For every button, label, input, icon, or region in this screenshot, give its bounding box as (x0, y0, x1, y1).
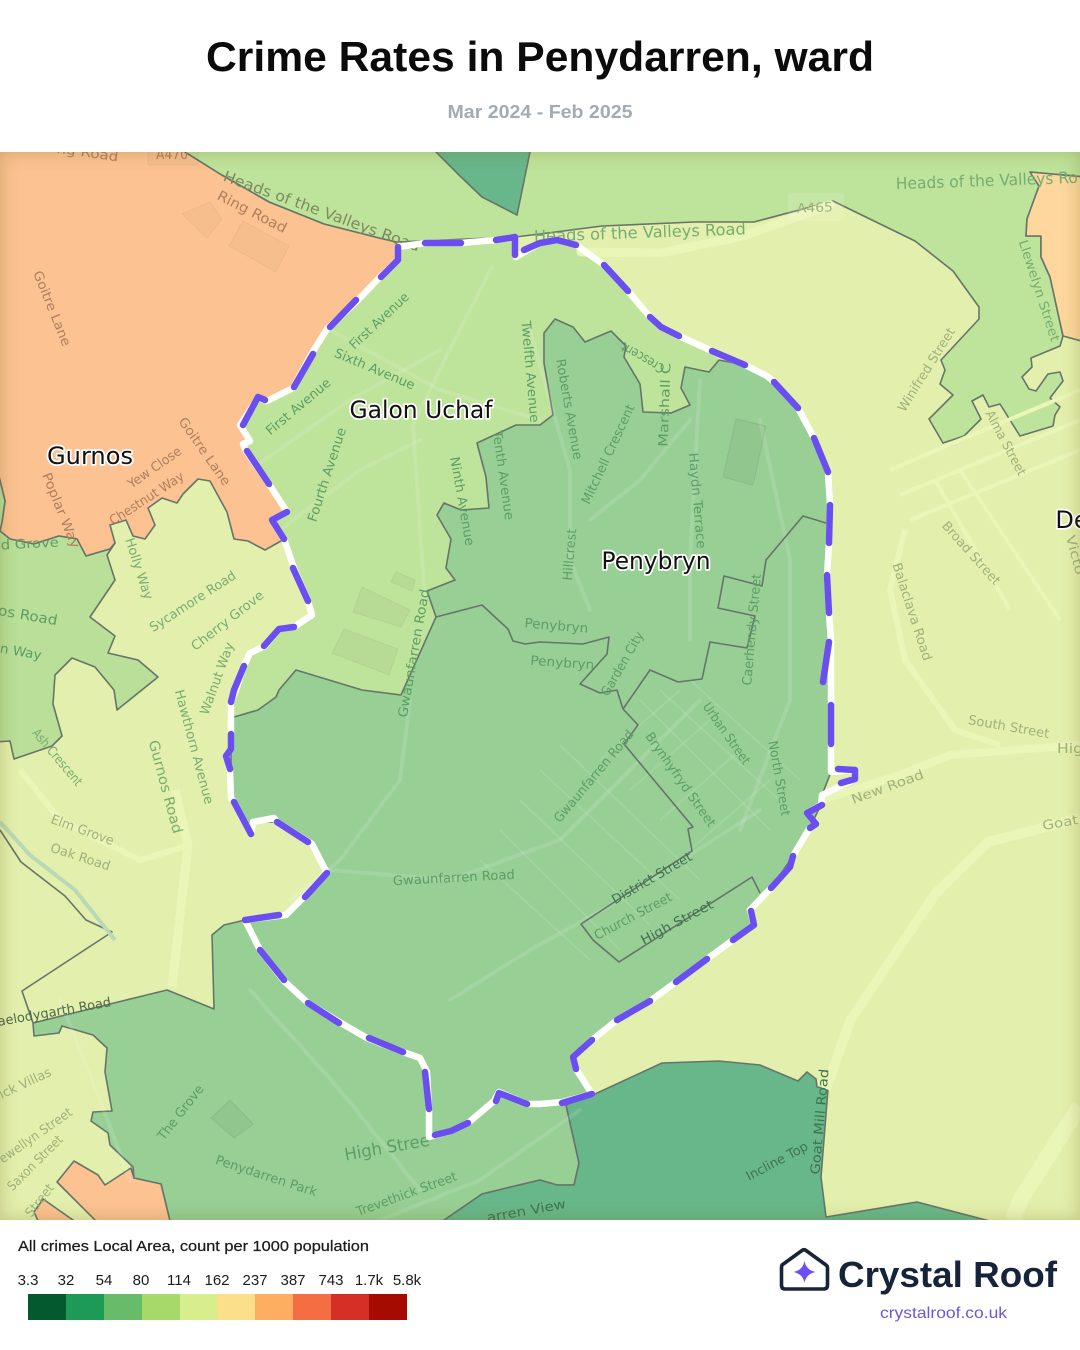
place labels (47, 396, 1080, 575)
street labels: Goat Mill Road (808, 1068, 833, 1175)
street labels: Ash Crescent (28, 726, 85, 789)
street labels: Urban Street (699, 700, 753, 768)
brand url: crystalroof.co.uk (880, 1305, 1008, 1322)
region: Penybryn and Penydarren green area (33, 319, 831, 1225)
legend scale values: 54 (96, 1272, 112, 1289)
region: north-east light orange area (1026, 172, 1080, 342)
street labels: First Avenue (263, 376, 334, 439)
street labels: Ninth Avenue (446, 456, 477, 547)
icon: house with star (782, 1250, 828, 1289)
brand name: Crystal Roof (838, 1254, 1058, 1295)
street labels: Penybryn (524, 616, 589, 637)
street labels: First Avenue (347, 290, 413, 353)
street labels: Garden City (598, 629, 648, 699)
street labels: Gurnos Road (145, 739, 185, 835)
street labels: North Street (764, 740, 792, 817)
region: south dark green area (437, 1061, 1005, 1225)
title: Crime Rates in Penydarren, ward (206, 33, 874, 80)
legend scale values: 162 (204, 1272, 230, 1289)
street labels: Marshall C (657, 363, 674, 447)
street labels: Holly Way (121, 536, 155, 602)
street labels: Hawthorn Avenue (171, 688, 216, 806)
street labels: Gwaunfarren Road (551, 727, 637, 826)
roads and buildings (20, 147, 1080, 1220)
place labels: Galon Uchaf (350, 396, 493, 424)
region: Galon Uchaf (231, 237, 719, 717)
street labels: Broad Street (938, 519, 1003, 588)
street labels: Poplar Way (38, 471, 82, 551)
street labels: Trevethick Street (354, 1170, 459, 1220)
region: top dark green patch (431, 147, 531, 215)
street labels: Sixth Avenue (332, 346, 417, 393)
legend (18, 1238, 422, 1320)
legend scale values: 3.3 (18, 1272, 38, 1289)
street labels: Oak Road (48, 841, 112, 874)
street labels: Brynhyfryd Street (642, 730, 718, 830)
street labels: Winifred Street (895, 325, 959, 415)
street labels: Street (23, 1181, 58, 1220)
street labels: Haydn Terrace (685, 452, 708, 549)
street labels: Penydarren Park (213, 1153, 319, 1200)
street labels: Cherry Grove (189, 588, 267, 654)
street labels: Mitchell Crescent (579, 402, 638, 507)
street labels: Balaclava Road (888, 561, 934, 663)
street labels: Walnut Way (198, 640, 238, 717)
street labels: Crescent (619, 339, 668, 376)
ward boundary: white line (226, 237, 855, 1137)
street labels: South Street (967, 713, 1050, 742)
legend scale values: 5.8k (393, 1272, 422, 1289)
street labels: d Grove (0, 535, 59, 554)
street labels: District Street (610, 850, 695, 908)
date subtitle: Mar 2024 - Feb 2025 (448, 102, 632, 122)
street labels: Elm Grove (49, 812, 116, 849)
region: south-west orange areas (34, 1161, 171, 1225)
street labels: Church Street (592, 890, 675, 944)
ward boundary: purple dashes (226, 237, 855, 1135)
street labels: Sycamore Road (147, 569, 239, 636)
street labels: Hig (1057, 742, 1080, 757)
street labels: Chestnut Way (107, 469, 187, 529)
legend scale values: 114 (167, 1272, 191, 1289)
street labels: Hillcrest (561, 528, 580, 581)
region: west green area (0, 460, 158, 759)
legend scale values: 237 (242, 1272, 268, 1289)
street labels: Saxon Street (5, 1133, 66, 1194)
street labels: Goitre Lane (175, 415, 233, 489)
street labels: Gwaunfarren Road (393, 868, 515, 889)
street labels: Roberts Avenue (552, 358, 585, 461)
street labels: Alma Street (982, 408, 1029, 479)
legend title: All crimes Local Area, count per 1000 population (18, 1238, 369, 1255)
street labels: Ring Road (214, 188, 289, 237)
street labels: The Grove (154, 1082, 207, 1144)
legend scale values: 387 (280, 1272, 306, 1289)
street labels: Tenth Avenue (489, 429, 516, 521)
street labels: Heads of the Valleys Road (221, 167, 423, 255)
brand logo (780, 1248, 1058, 1322)
street labels: Twelfth Avenue (517, 319, 541, 423)
street labels: High Street (639, 898, 716, 948)
street labels: Incline Top (744, 1139, 811, 1184)
place labels: Gurnos (47, 442, 133, 470)
street labels: Goat (1041, 813, 1079, 834)
street labels: Goitre Lane (29, 269, 73, 349)
street labels: New Road (850, 768, 926, 808)
street labels: Heads of the Valleys Road (534, 219, 746, 246)
street labels: Caerhendy Street (740, 573, 765, 686)
region: northern green area (177, 147, 1080, 443)
street labels: Penybryn (530, 654, 595, 673)
legend scale values: 1.7k (355, 1272, 384, 1289)
legend colour ramp (28, 1294, 407, 1320)
region: Gurnos orange area (0, 147, 398, 556)
street labels: Heads of the Valleys Ro (896, 168, 1078, 193)
street labels: Llewelyn Street (1015, 238, 1062, 344)
street labels: Fourth Avenue (305, 426, 350, 524)
street labels: High Stree (343, 1131, 431, 1165)
street labels: Gwaunfarren Road (396, 588, 433, 719)
legend scale values: 32 (58, 1272, 74, 1289)
street labels: Yew Close (125, 444, 185, 493)
place labels: Penybryn (602, 547, 710, 575)
street labels: A465 (797, 200, 833, 217)
legend scale values: 80 (133, 1272, 149, 1289)
legend scale values: 743 (318, 1272, 344, 1289)
legend scale values (18, 1272, 422, 1289)
ward subdivision lines (0, 516, 826, 1023)
choropleth map panel (0, 152, 1080, 1220)
